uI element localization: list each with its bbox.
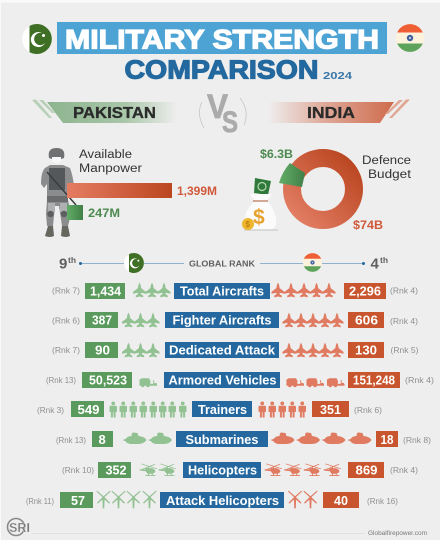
flag: India [396,24,424,52]
flag: Pakistan small [124,253,144,273]
flag: India small [303,253,322,272]
row: helicopters: 869 [356,462,378,478]
rank: India 4th [370,255,388,272]
global rank line [79,260,365,268]
row: helicopters: Helicopters [188,462,257,478]
text: available manpower: Available [79,149,132,161]
row: submarines: (Rnk 13) [56,435,86,445]
row: dedicated attack: (Rnk 5) [390,345,419,355]
label: Pakistan budget: $6.3B [260,147,293,161]
row: dedicated attack: 130 [355,342,377,358]
row: helicopters: (Rnk 10) [62,465,94,475]
row: armored vehicles: 151,248 [353,372,395,388]
donut chart: defence budget [279,158,354,220]
icon: soldier [41,148,76,237]
row: fighter aircrafts: (Rnk 4) [390,316,418,326]
row: submarines: 18 [380,432,394,447]
bar: Pakistan manpower: 247M [88,206,120,220]
row: submarines: 8 [98,432,106,447]
bar: India manpower [67,183,217,198]
rank: Pakistan 9th: th [68,255,76,265]
row: attack helicopters: Attack Helicopters [166,493,279,508]
flag: Pakistan [22,24,52,54]
row: helicopters [62,462,418,478]
row: total aircrafts: (Rnk 4) [390,286,418,296]
row: attack helicopters: 40 [334,493,348,508]
row: trainers: 351 [320,402,341,417]
title: Comparison 2024: COMPARISON [124,54,318,84]
row: fighter aircrafts [52,312,418,328]
row: total aircrafts: 1,434 [90,284,122,298]
rank: Pakistan 9th [59,255,76,272]
row: trainers [37,401,382,417]
row: armored vehicles: Armored Vehicles [168,372,276,388]
row: total aircrafts [52,283,418,299]
row: trainers: (Rnk 6) [354,405,382,415]
row: trainers: (Rnk 3) [37,405,64,415]
row: submarines: (Rnk 8) [403,435,431,445]
bar: Pakistan manpower [67,205,120,220]
row: dedicated attack: Dedicated Attack [169,342,276,358]
text: defence budget [362,155,412,181]
row: attack helicopters: (Rnk 11) [26,496,54,506]
text: available manpower [79,149,142,175]
versus badge: S [222,106,238,139]
row: fighter aircrafts: 387 [92,312,112,328]
row: dedicated attack [52,342,419,358]
row: attack helicopters: (Rnk 16) [367,496,398,506]
row: attack helicopters [26,491,398,508]
row: armored vehicles: 50,523 [89,372,127,388]
text: defence budget: Defence [362,155,411,167]
row: trainers: 549 [78,402,100,417]
versus badge [199,88,246,139]
row: armored vehicles: (Rnk 4) [405,375,434,385]
bar: India manpower: 1,399M [177,184,217,198]
global rank line: GLOBAL RANK [189,260,255,268]
icon: money bag [242,178,278,230]
rank: India 4th: th [380,255,388,265]
title: Military Strength: MILITARY STRENGTH [65,24,379,54]
row: fighter aircrafts: 606 [355,312,378,328]
icon: money bag: $ [253,206,265,229]
banner: Pakistan [32,100,177,123]
icon: money bag: $ [246,220,250,229]
row: submarines: Submarines [186,432,258,447]
banner: Pakistan: PAKISTAN [73,105,156,122]
source credit: Globalfirepower.com [368,530,427,537]
row: attack helicopters: 57 [71,493,85,508]
row: total aircrafts: 2,296 [349,284,381,298]
text: defence budget: Budget [368,169,412,181]
row: dedicated attack: 90 [95,342,110,358]
row: helicopters: (Rnk 4) [390,465,418,475]
rank: Pakistan 9th: 9 [59,256,67,272]
banner: India: INDIA [307,105,355,122]
text: available manpower: Manpower [79,163,142,175]
label: India budget: $74B [353,218,383,232]
logo: SRI: SRI [9,520,30,535]
row: armored vehicles [46,372,434,388]
row: submarines [56,431,431,447]
title: Comparison 2024: 2024 [323,70,352,82]
row: armored vehicles: (Rnk 13) [46,375,76,385]
row: fighter aircrafts: Fighter Aircrafts [172,312,272,328]
row: dedicated attack: (Rnk 7) [52,345,80,355]
versus badge: V [207,88,228,126]
row: total aircrafts: (Rnk 7) [52,286,80,296]
row: total aircrafts: Total Aircrafts [180,284,264,298]
rank: India 4th: 4 [370,256,380,272]
banner: India [268,100,410,123]
row: fighter aircrafts: (Rnk 6) [52,316,80,326]
row: helicopters: 352 [106,462,126,478]
row: trainers: Trainers [198,402,247,417]
